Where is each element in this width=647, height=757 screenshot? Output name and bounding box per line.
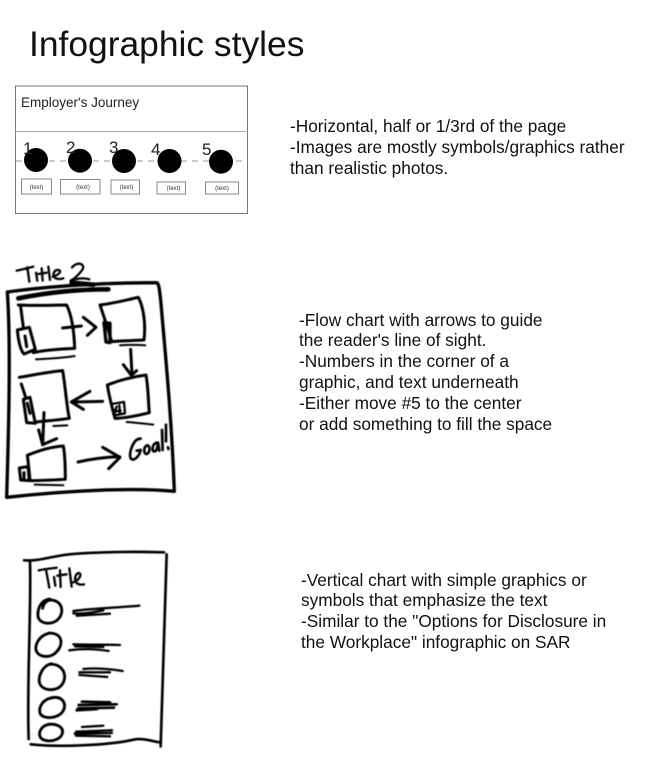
step numbers: 3 xyxy=(109,138,118,157)
text block: vertical chart notes: the Workplace" infographic on SAR xyxy=(301,632,570,652)
text block: flow chart notes: graphic, and text underneath xyxy=(299,372,519,392)
text block: flow chart notes: the reader's line of sight. xyxy=(299,330,486,350)
text block: vertical chart notes: -Similar to the "Options for Disclosure in xyxy=(301,611,606,631)
text block: vertical chart notes: -Vertical chart with simple graphics or xyxy=(301,570,587,590)
list row 4 xyxy=(40,697,117,718)
text boxes: (text) xyxy=(30,185,43,191)
panel: horizontal journey wireframe xyxy=(16,86,248,214)
list row 2 xyxy=(36,633,120,656)
step numbers xyxy=(23,138,211,159)
step 3 graphic xyxy=(19,371,69,426)
text boxes xyxy=(22,179,238,194)
sketch: vertical list layout xyxy=(24,552,167,746)
step numbers: 5 xyxy=(202,140,211,159)
text block: flow chart notes: -Either move #5 to the center xyxy=(299,393,522,413)
text boxes: (text) xyxy=(215,186,229,192)
handwritten label: Goal! xyxy=(130,425,168,460)
step 1 graphic xyxy=(17,305,75,359)
text boxes: (text) xyxy=(120,185,133,191)
text block: flow chart notes: -Flow chart with arrows to guide xyxy=(299,310,543,330)
panel heading: Employer's Journey: Employer's Journey xyxy=(21,95,139,110)
text block: vertical chart notes xyxy=(301,570,606,652)
text block: horizontal style notes: than realistic photos. xyxy=(290,158,448,178)
text block: flow chart notes: -Numbers in the corner of a xyxy=(299,351,509,371)
list row 1 xyxy=(38,599,139,623)
step 5 graphic xyxy=(19,446,65,485)
list row 3 xyxy=(39,664,123,690)
step 2 graphic xyxy=(100,297,145,345)
step 4 graphic xyxy=(107,375,153,425)
timeline circles xyxy=(24,148,233,174)
text block: horizontal style notes: -Horizontal, half or 1/3rd of the page xyxy=(290,116,566,136)
sketch: flow chart layout xyxy=(7,264,174,497)
page outline xyxy=(24,552,167,746)
step numbers: 2 xyxy=(66,138,75,157)
page outline xyxy=(7,283,174,497)
text block: flow chart notes: or add something to fill the space xyxy=(299,414,552,434)
title: Infographic styles xyxy=(29,24,304,64)
text block: flow chart notes xyxy=(299,310,552,434)
text block: horizontal style notes xyxy=(290,116,625,178)
flow arrows xyxy=(39,317,137,469)
sketch title: Title xyxy=(39,568,84,588)
list row 5 xyxy=(40,724,112,741)
text block: vertical chart notes: symbols that emphasize the text xyxy=(301,590,548,610)
step numbers: 1 xyxy=(23,139,32,158)
text boxes: (text) xyxy=(167,186,180,192)
text boxes: (text) xyxy=(76,185,90,191)
step numbers: 4 xyxy=(151,140,160,159)
sketch title: Title 2 xyxy=(17,264,89,282)
text block: horizontal style notes: -Images are mostly symbols/graphics rather xyxy=(290,137,625,157)
